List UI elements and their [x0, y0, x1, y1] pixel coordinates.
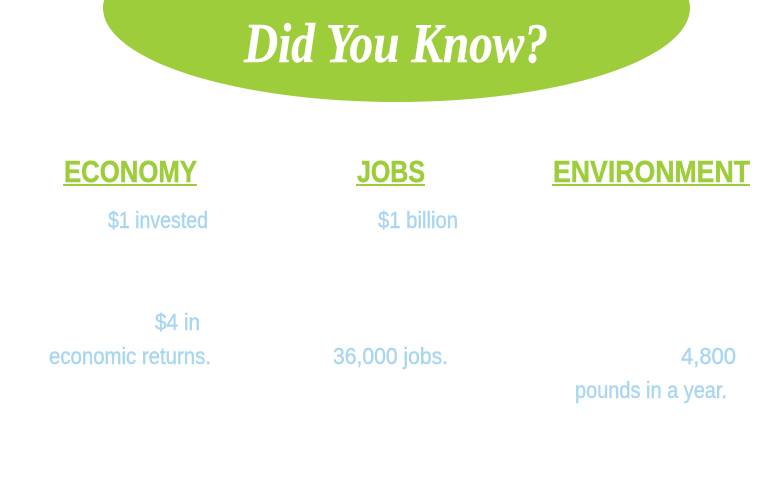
column: economy [49, 154, 211, 369]
heading: economy: ECONOMY [64, 154, 197, 189]
header banner: green ellipse with title [103, 0, 690, 102]
column: jobs [333, 154, 458, 369]
text: 4,800: 4,800 [681, 343, 736, 369]
heading: jobs: JOBS [357, 154, 425, 189]
text: pounds in a year.: pounds in a year. [575, 377, 727, 403]
text: economic returns.: economic returns. [49, 343, 211, 369]
text: $1 invested: $1 invested [108, 207, 208, 233]
text: $4 in: $4 in [155, 309, 200, 335]
text: 36,000 jobs.: 36,000 jobs. [333, 343, 448, 369]
title: Did You Know? [243, 13, 548, 75]
text: $1 billion: $1 billion [378, 207, 458, 233]
heading: environment: ENVIRONMENT [553, 154, 750, 189]
column: environment [552, 154, 750, 403]
